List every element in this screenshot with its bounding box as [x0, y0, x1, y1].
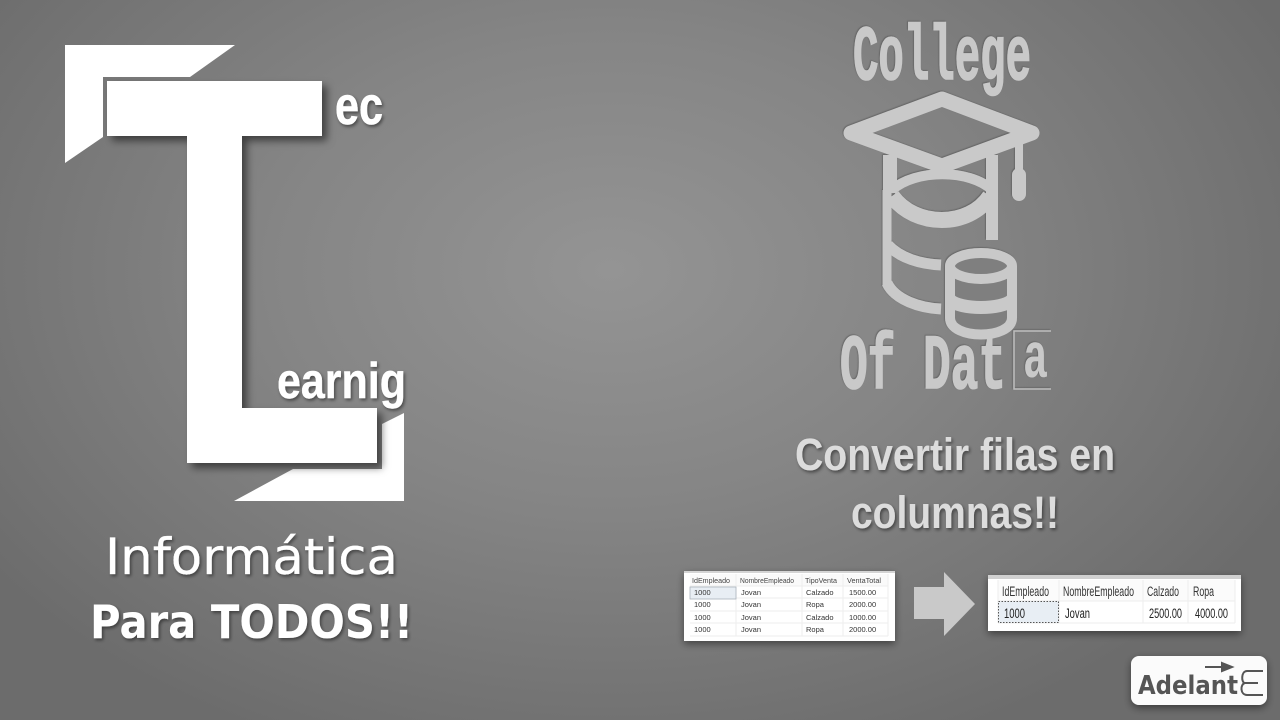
table: pivoted result — [988, 575, 1241, 631]
logo: Tec Learnig — [65, 45, 406, 501]
data rows: Jovan — [741, 625, 761, 634]
tassel — [1015, 142, 1023, 172]
header row: NombreEmpleado — [740, 576, 794, 585]
badge final letter — [1241, 671, 1263, 695]
data row: 4000.00 — [1195, 606, 1228, 621]
small cylinder walls — [950, 266, 1012, 334]
text: earnig: earnig — [277, 353, 406, 409]
data rows: Jovan — [741, 613, 761, 622]
heading: Convertir filas en columnas — [795, 429, 1115, 538]
data rows: Calzado — [806, 613, 834, 622]
tagline: Informática: Informática — [105, 528, 398, 586]
top-left chevron — [65, 45, 235, 163]
data rows: 1000 — [694, 588, 711, 597]
header row: NombreEmpleado — [1063, 584, 1134, 599]
badge background — [1131, 656, 1267, 705]
badge: AdelantE — [1131, 656, 1267, 705]
data rows: 2000.00 — [849, 625, 876, 634]
database middle curve — [888, 245, 941, 265]
database left wall — [882, 190, 892, 285]
small cylinder band — [950, 300, 1012, 308]
@ frame — [1014, 331, 1051, 389]
icon: small arrow — [1205, 663, 1232, 671]
header row: Ropa — [1193, 584, 1214, 599]
data row: Jovan — [1065, 606, 1090, 621]
table background — [684, 571, 895, 641]
heading line two: columnas!! — [851, 487, 1059, 538]
header row — [692, 576, 881, 585]
header row: IdEmpleado — [692, 576, 730, 585]
bottom-right chevron — [234, 413, 404, 501]
icon: graduation cap over database — [851, 99, 1032, 334]
result background — [988, 575, 1241, 631]
text: Of Dat: Of Dat — [840, 324, 1006, 412]
data rows: 1000 — [694, 613, 711, 622]
small cylinder top — [950, 253, 1012, 279]
table: source rows — [684, 571, 895, 641]
data row — [1004, 606, 1228, 621]
header row: VentaTotal — [847, 576, 881, 585]
data rows: Calzado — [806, 588, 834, 597]
data rows: 1000 — [694, 600, 711, 609]
data rows: Jovan — [741, 588, 761, 597]
logo: College Of Data — [840, 15, 1051, 412]
selected cell — [998, 602, 1058, 622]
text: @ box — [1014, 325, 1051, 397]
badge text: Adelant — [1138, 671, 1238, 701]
tagline: Para TODOS!!: Para TODOS!! — [90, 595, 413, 649]
cap board — [851, 99, 1032, 166]
arrow — [914, 572, 975, 636]
data row: 1000 — [1004, 606, 1025, 621]
data rows — [694, 588, 876, 634]
header row: Calzado — [1147, 584, 1179, 599]
data rows: Jovan — [741, 600, 761, 609]
selected cell — [690, 587, 736, 599]
database top ring — [892, 174, 992, 190]
@ letter: a — [1023, 325, 1048, 397]
header row: TipoVenta — [805, 576, 838, 585]
cap left leg — [883, 155, 897, 193]
text: ec: ec — [335, 76, 383, 136]
data rows: 2000.00 — [849, 600, 876, 609]
data row: 2500.00 — [1149, 606, 1182, 621]
data rows: Ropa — [806, 625, 825, 634]
data rows: Ropa — [806, 600, 825, 609]
database bottom curve — [887, 283, 941, 309]
heading line one: Convertir filas en — [795, 429, 1115, 480]
data rows: 1500.00 — [849, 588, 876, 597]
cap right leg — [986, 155, 998, 240]
text: College: College — [853, 15, 1031, 103]
tassel bob — [1012, 175, 1026, 194]
small cylinder — [950, 253, 1012, 334]
data rows: 1000 — [694, 625, 711, 634]
header row — [1002, 584, 1214, 599]
letter shape T and L — [107, 81, 377, 463]
data rows: 1000.00 — [849, 613, 876, 622]
header row: IdEmpleado — [1002, 584, 1049, 599]
database top curve — [892, 196, 990, 220]
